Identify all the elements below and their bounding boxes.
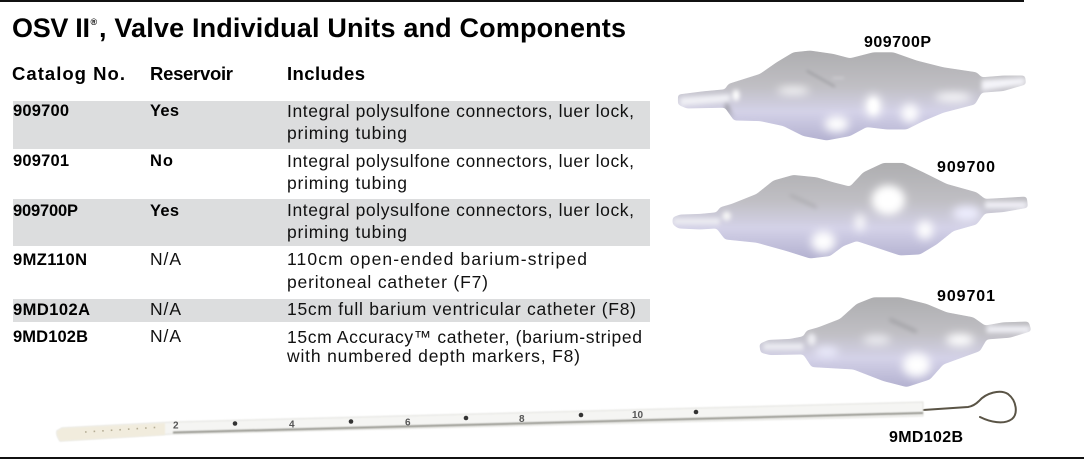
table row: 9MZ110N: 110cm open-ended barium-striped: [287, 249, 587, 269]
table row: 909701: 909701: [13, 152, 69, 170]
stylet wire loop: [923, 392, 1016, 422]
table row: 909700: Yes: [150, 102, 179, 120]
table header: Includes: [287, 63, 365, 84]
barium stripe: [173, 413, 923, 432]
table row: 9MD102A: 15cm full barium ventricular catheter (F8): [287, 299, 636, 319]
catheter tip: [57, 423, 165, 441]
valve image: 909700P: [678, 51, 1026, 140]
catheter with stylet: [57, 392, 1016, 441]
table row: 9MZ110N: 9MZ110N: [13, 251, 87, 269]
table row: 909701: [13, 151, 634, 193]
valve image: 909700: [673, 163, 1028, 258]
label: 909701: 909701: [937, 288, 995, 305]
depth numbers: 10: [632, 410, 644, 421]
table header: Reservoir: [150, 63, 233, 84]
table row: 9MD102B: 9MD102B: [13, 328, 88, 346]
table row: 9MD102A: 9MD102A: [13, 301, 90, 319]
depth numbers: 8: [519, 414, 525, 425]
table row: 9MZ110N: [13, 249, 587, 292]
table row: 909700: Integral polysulfone connectors, luer lock,: [287, 101, 634, 121]
title: OSV II: [12, 13, 90, 43]
table row: 9MD102B: 15cm Accuracy™ catheter, (barium-striped: [287, 327, 642, 347]
table row: 9MD102A: [13, 299, 650, 322]
table row: 9MZ110N: peritoneal catheter (F7): [287, 272, 488, 292]
table header: [12, 63, 365, 84]
table row: 9MD102B: N/A: [150, 326, 181, 346]
table row: 909700: 909700: [13, 102, 69, 120]
table row: 909700P: 909700P: [13, 202, 78, 220]
title: , Valve Individual Units and Components: [99, 13, 626, 43]
table row: 909700P: [13, 199, 650, 246]
table row: 909701: Integral polysulfone connectors, luer lock,: [287, 151, 634, 171]
table row: 9MD102B: with numbered depth markers, F8): [286, 346, 580, 366]
table row: 9MZ110N: N/A: [150, 249, 181, 269]
table row: 909701: No: [150, 152, 173, 170]
valve image: 909701: [759, 297, 1031, 387]
table row: 909700P: Yes: [150, 202, 179, 220]
label: 9MD102B: 9MD102B: [889, 429, 963, 446]
table row: 909700: priming tubing: [287, 123, 407, 143]
table row: 9MD102B: [13, 326, 642, 366]
depth numbers: 2: [173, 420, 179, 432]
catheter tube: [57, 402, 923, 441]
label: 909700: 909700: [937, 159, 995, 176]
table row: 909700: [13, 101, 650, 149]
depth markers: [233, 410, 698, 426]
table row: 909700P: Integral polysulfone connectors, luer lock,: [287, 200, 634, 220]
table row: 9MD102A: N/A: [150, 299, 181, 319]
table header: Catalog No.: [12, 63, 125, 84]
depth numbers: 6: [405, 418, 411, 428]
title: ®: [90, 17, 98, 27]
table row: 909700P: priming tubing: [287, 222, 407, 242]
perforations: [85, 427, 162, 432]
depth numbers: [173, 410, 644, 432]
label: 909700P: 909700P: [864, 34, 931, 51]
depth numbers: 4: [289, 420, 295, 430]
table row: 909701: priming tubing: [287, 173, 407, 193]
